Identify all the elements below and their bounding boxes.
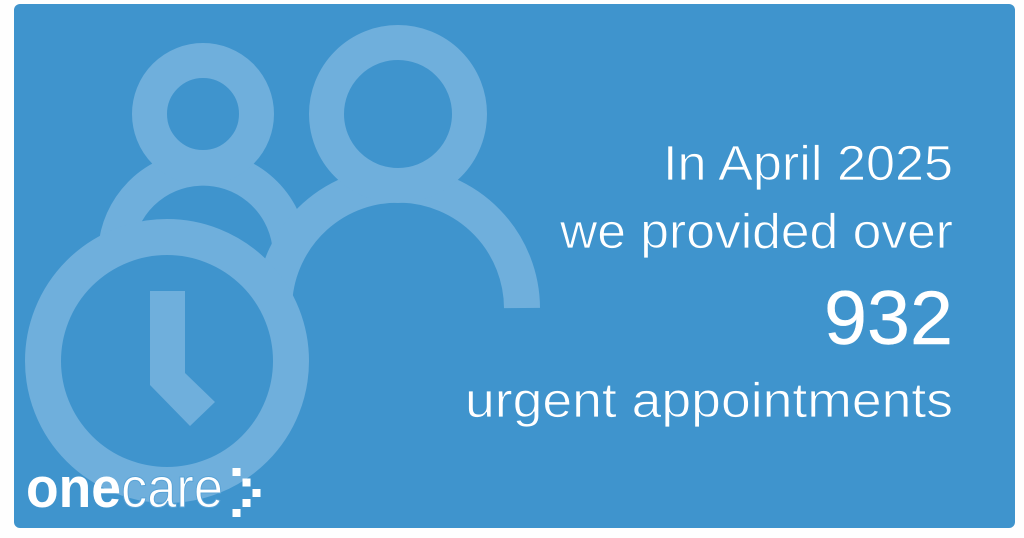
icon: left person body [116,168,289,250]
logo: onecare [26,456,260,520]
icon: right person head [326,42,470,186]
icon: two people with clock [43,42,522,485]
text: In April 2025: In April 2025 [663,137,953,191]
icon: right person body [274,185,522,308]
logo wordmark: care: care [121,456,223,520]
icon: clock face [43,237,291,485]
logo: dotted chevron [232,468,260,517]
logo wordmark: one: one [26,456,121,520]
text: urgent appointments: urgent appointments [465,374,953,428]
text: we provided over: we provided over [559,205,953,259]
icon: clock hands [150,291,215,426]
icon: left person head [150,60,256,168]
text: 932: 932 [824,276,953,361]
